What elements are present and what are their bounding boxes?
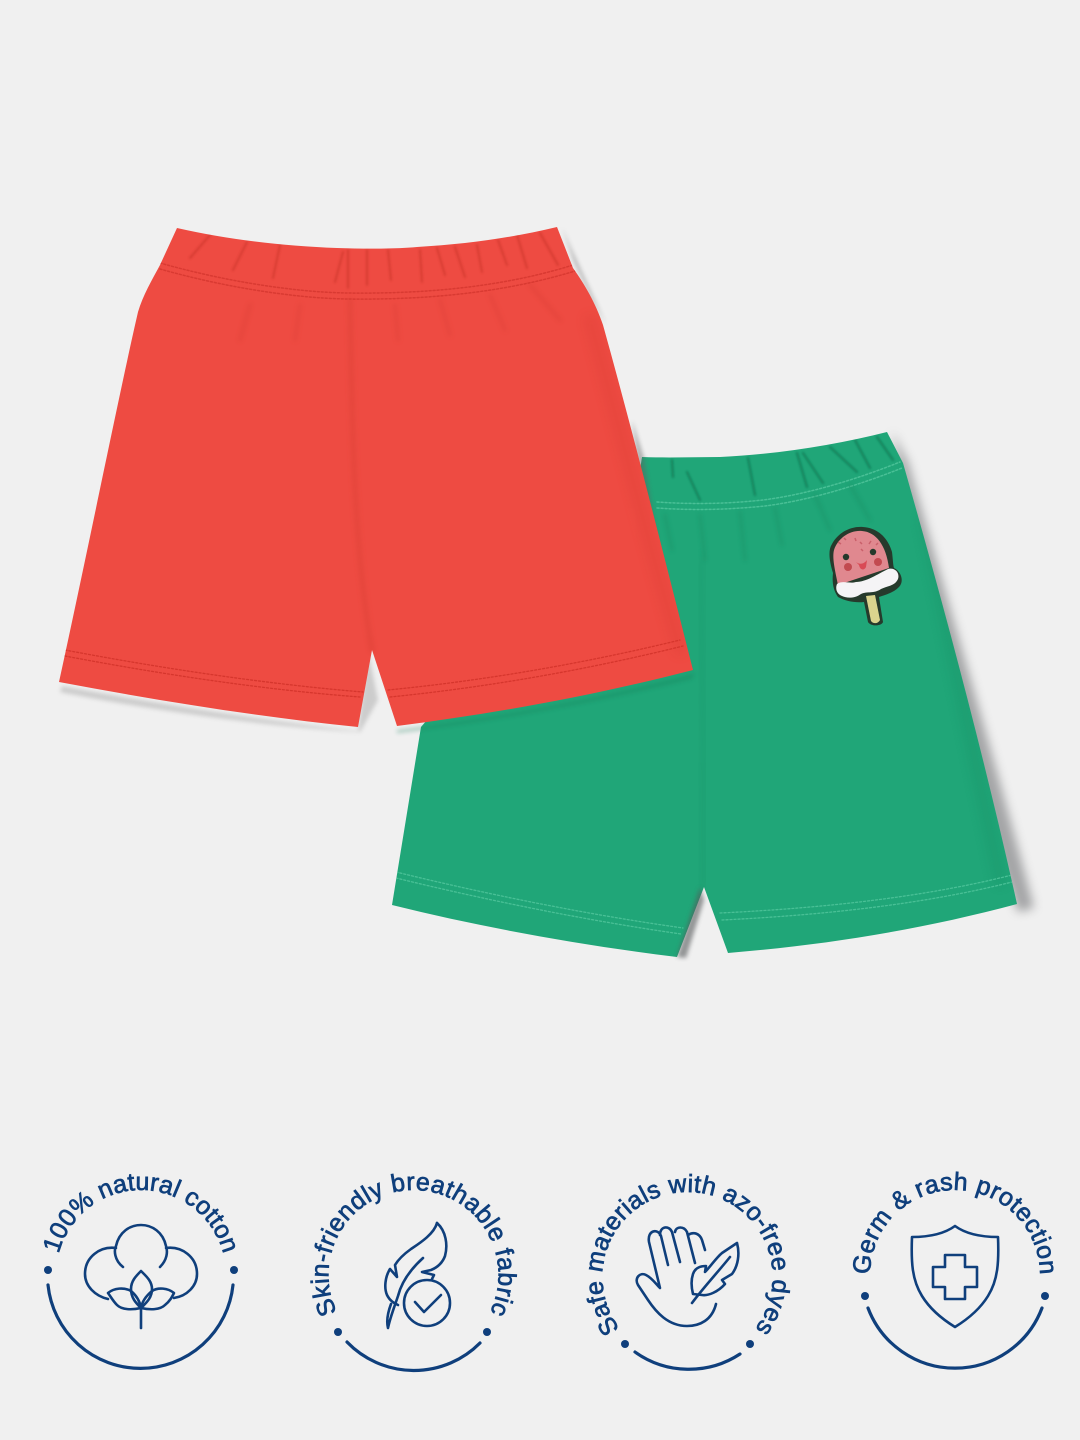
red shorts shadow bbox=[632, 420, 660, 560]
icon: shield with cross bbox=[912, 1226, 998, 1327]
face bbox=[838, 538, 882, 571]
green shorts shadow bbox=[892, 432, 1034, 912]
badge text: 100% natural cotton bbox=[44, 1174, 236, 1253]
badge text: Skin-friendly breathable fabric bbox=[310, 1174, 518, 1316]
badge arc bbox=[635, 1352, 740, 1369]
stick bbox=[866, 595, 880, 623]
icon: feather with check bbox=[385, 1223, 450, 1328]
patch outline bbox=[829, 527, 902, 625]
icon: hand with feather bbox=[637, 1227, 738, 1326]
red shorts folds bbox=[65, 233, 683, 697]
badge arc bbox=[48, 1285, 233, 1368]
badge dots bbox=[44, 1266, 238, 1274]
badge: skin-friendly breathable fabric bbox=[310, 1174, 518, 1372]
badge arc bbox=[868, 1308, 1042, 1368]
badge text: Germ & rash protection bbox=[852, 1171, 1054, 1274]
badge dots bbox=[861, 1292, 1049, 1300]
green shorts body bbox=[392, 432, 1017, 957]
red shorts body bbox=[59, 227, 693, 727]
badge dots bbox=[621, 1340, 754, 1348]
badge text: Safe materials with azo-free dyes bbox=[586, 1174, 790, 1336]
crotch gap shadow bbox=[677, 887, 704, 958]
badge: safe materials with azo-free dyes bbox=[586, 1174, 790, 1371]
badge: 100% natural cotton bbox=[44, 1174, 238, 1370]
badge: germ & rash protection bbox=[852, 1171, 1054, 1370]
ice cream body bbox=[833, 531, 889, 585]
badge dots bbox=[334, 1328, 491, 1336]
icon: cotton boll bbox=[85, 1225, 197, 1328]
badge arc bbox=[347, 1342, 480, 1370]
green shorts folds bbox=[396, 437, 1012, 934]
infographic page bbox=[44, 227, 1054, 1372]
cream bbox=[836, 569, 898, 598]
popsicle patch bbox=[829, 527, 902, 625]
green shorts bbox=[392, 432, 1034, 958]
red shorts bbox=[59, 227, 695, 733]
